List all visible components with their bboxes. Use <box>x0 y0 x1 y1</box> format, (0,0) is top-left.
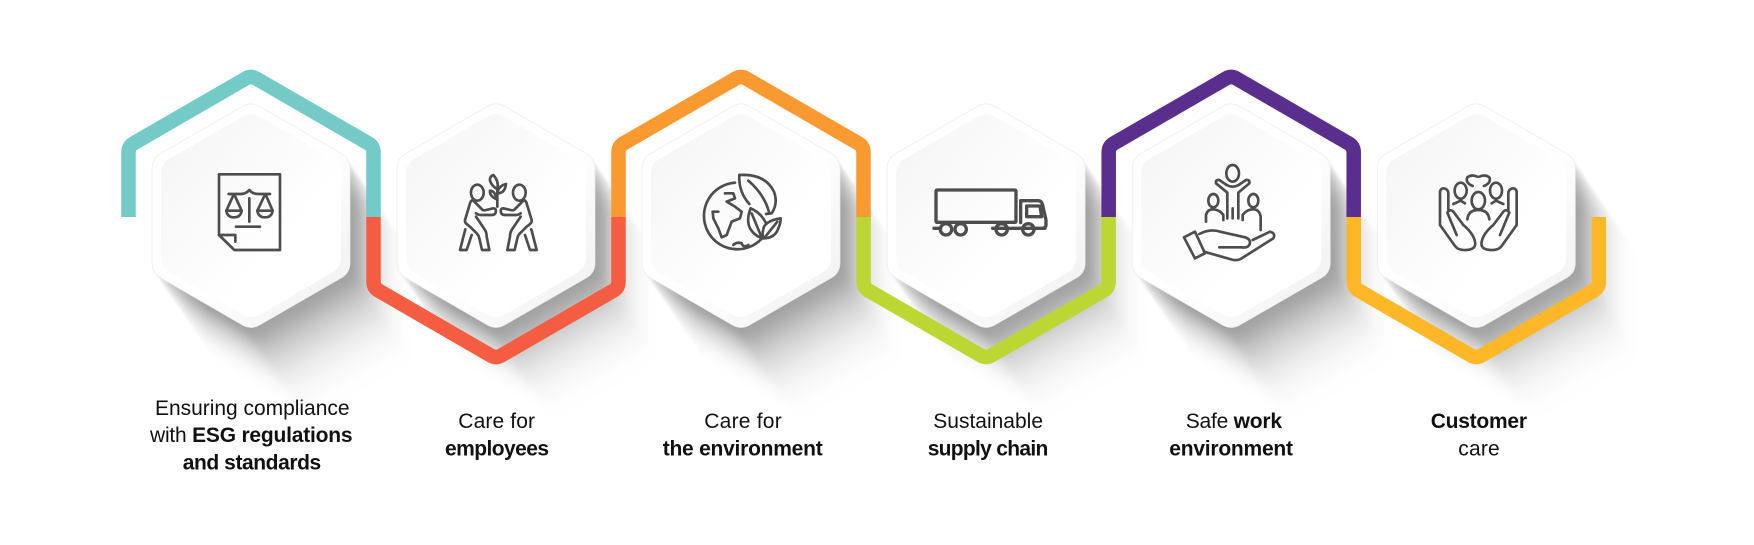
caption: care for the environment <box>663 410 823 460</box>
connector: yellow bottom arc <box>1354 217 1599 357</box>
caption: customer care <box>1431 410 1527 460</box>
caption: safe work environment: Safe work <box>1186 410 1282 433</box>
connector: orange top arc <box>618 77 864 217</box>
caption: customer care: care <box>1458 438 1500 460</box>
icon: globe with leaves <box>704 175 781 249</box>
caption: care for employees: employees <box>445 438 549 460</box>
panel: supply chain hexagon <box>887 104 1085 328</box>
caption: customer care: Customer <box>1431 410 1527 433</box>
icon: legal document with scales <box>219 174 280 250</box>
caption: care for the environment: the environment <box>663 438 823 460</box>
caption: safe work environment: environment <box>1169 438 1293 460</box>
caption: sustainable supply chain: Sustainable <box>933 410 1043 433</box>
caption: ESG regulations <box>149 397 352 474</box>
caption: safe work environment <box>1169 410 1293 460</box>
panel: environment hexagon <box>642 104 840 328</box>
connector: red bottom arc <box>374 217 618 357</box>
panel: safe work environment hexagon <box>1132 104 1330 328</box>
icon: delivery truck <box>934 190 1046 235</box>
icon: group of customers in two hands <box>1440 175 1517 250</box>
caption: sustainable supply chain <box>928 410 1048 460</box>
icon: people held in an open hand <box>1184 165 1274 260</box>
caption: care for employees: Care for <box>458 410 535 433</box>
caption: ESG regulations: and standards <box>183 452 321 474</box>
caption: ESG regulations: Ensuring compliance <box>155 397 350 420</box>
panel: customer care hexagon <box>1377 104 1575 328</box>
connector: teal top arc <box>128 77 374 217</box>
panel: ESG compliance hexagon <box>152 104 350 328</box>
caption: sustainable supply chain: supply chain <box>928 438 1048 460</box>
connector: green bottom arc <box>864 217 1109 357</box>
panel: employees hexagon <box>397 104 595 328</box>
caption: care for employees <box>445 410 549 460</box>
icon: two people planting a sprout <box>460 175 537 250</box>
caption: care for the environment: Care for <box>704 410 782 433</box>
caption: ESG regulations: with ESG regulations <box>149 424 352 447</box>
connector: purple top arc <box>1109 77 1354 217</box>
long shadows behind the hexagons <box>154 106 1637 417</box>
